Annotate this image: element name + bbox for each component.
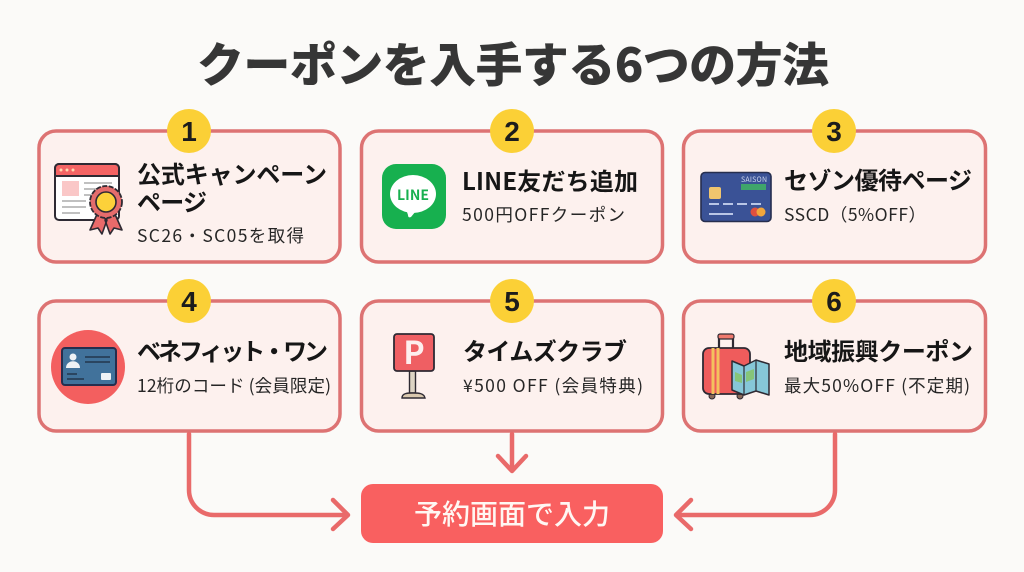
- panel: 1 official campaign page: [39, 109, 340, 262]
- number badge 6: 6: [826, 286, 842, 317]
- number badge 2: 2: [504, 116, 520, 147]
- panel: 4 Benefit One: [39, 279, 340, 431]
- number badge 4: [167, 279, 211, 323]
- arrow: centre card to input button: [498, 434, 526, 471]
- icon: member card: [51, 330, 125, 404]
- icon: parking sign: P: [403, 328, 425, 374]
- detail 5: ¥500 OFF (会員特典): [463, 373, 643, 398]
- heading 2: LINE友だち追加: [462, 162, 638, 197]
- panel: 6 regional coupon: [684, 279, 986, 431]
- number badge 1: 1: [181, 116, 197, 147]
- detail 2: 500円OFFクーポン: [462, 202, 625, 227]
- panel: 3 Saison page: [684, 109, 986, 262]
- number badge 3: 3: [826, 116, 842, 147]
- arrow: left card to input button: [189, 434, 348, 529]
- number badge 3: [812, 109, 856, 153]
- number badge 4: 4: [181, 286, 197, 317]
- heading 1: 公式キャンペーン: [137, 155, 327, 190]
- heading 3: セゾン優待ページ: [784, 161, 972, 196]
- icon: credit card: SAISON: [741, 175, 767, 185]
- number badge 5: 5: [504, 286, 520, 317]
- heading 5: タイムズクラブ: [463, 332, 627, 367]
- number badge 5: [490, 279, 534, 323]
- number badge 2: [490, 109, 534, 153]
- icon: credit card: [701, 172, 771, 222]
- detail 1: SC26・SC05を取得: [137, 223, 304, 248]
- detail 3: SSCD（5%OFF）: [784, 202, 926, 227]
- title: クーポンを入手する6つの方法: [197, 27, 829, 96]
- panel: 2 LINE friend: [362, 109, 662, 262]
- icon: LINE: [382, 164, 446, 229]
- icon: parking sign: [394, 328, 434, 398]
- heading 6: 地域振興クーポン: [784, 332, 973, 367]
- heading 4: ベネフィット・ワン: [137, 332, 328, 367]
- icon: suitcase and map: [703, 334, 769, 399]
- call to action button: 予約画面で入力: [414, 493, 610, 533]
- heading 1 second line: ページ: [137, 183, 207, 218]
- call to action button: [361, 484, 663, 543]
- arrow: right card to input button: [676, 434, 835, 529]
- number badge 1: [167, 109, 211, 153]
- icon: LINE: LINE: [397, 185, 429, 205]
- detail 4: 12桁のコード (会員限定): [137, 373, 331, 398]
- icon: web page with rosette: [55, 164, 122, 234]
- detail 6: 最大50%OFF (不定期): [784, 373, 970, 398]
- panel: 5 Times Club: [362, 279, 662, 431]
- number badge 6: [812, 279, 856, 323]
